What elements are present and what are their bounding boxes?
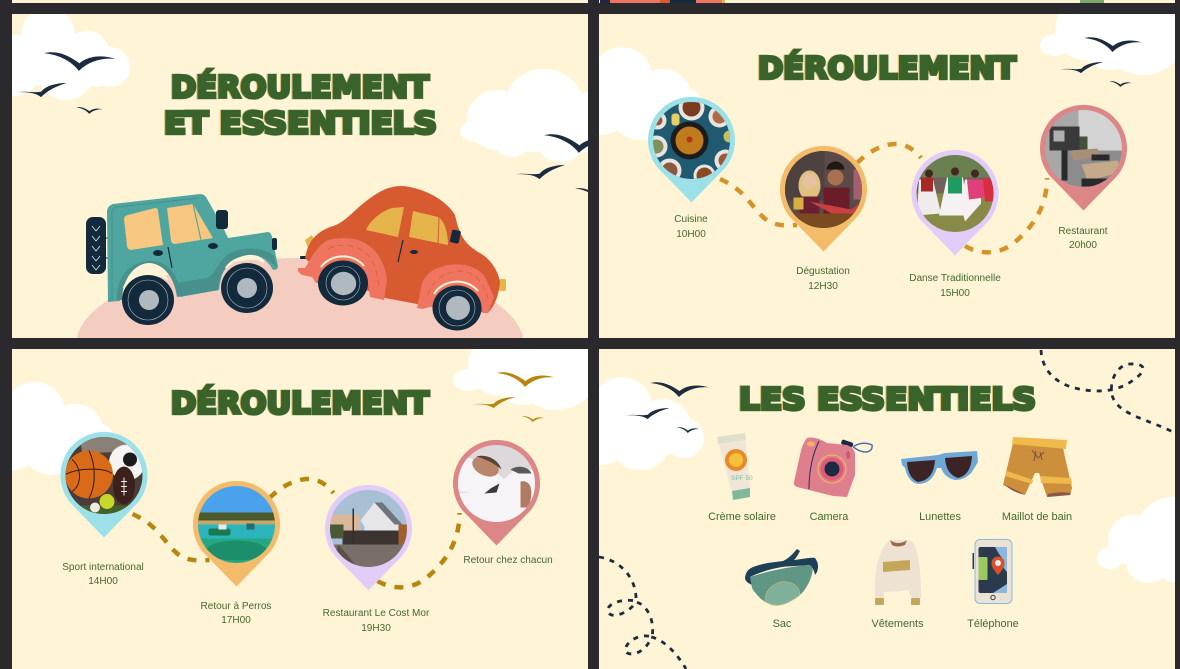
panel: les essentiels: [570, 349, 1180, 669]
dashed trail: top right: [1041, 350, 1175, 433]
panel: déroulement matin: [570, 0, 1180, 338]
panel: déroulement après-midi: [12, 349, 588, 669]
icon: crème solaire: SPF 50: [731, 475, 753, 482]
birds: right flock: [516, 134, 588, 192]
label: vêtements: Vêtements: [871, 618, 924, 630]
icon: sac: [745, 549, 818, 606]
birds: top left flock: [16, 52, 115, 114]
label: cuisine: Cuisine: [674, 214, 708, 225]
label: crème solaire: Crème solaire: [708, 511, 776, 523]
dashed route: [132, 479, 460, 587]
label: retour chez chacun: Retour chez chacun: [463, 555, 553, 566]
icon: crème solaire: [717, 433, 753, 500]
label: danse: Danse Traditionnelle: [909, 273, 1001, 284]
cloud: left: [599, 377, 704, 470]
panel: title slide: [12, 14, 588, 338]
label: restaurant: 20h00: [1069, 240, 1097, 251]
icon: maillot de bain: [1003, 437, 1072, 497]
pin: restaurant: [1040, 105, 1127, 210]
cloud: top right: [1040, 14, 1175, 75]
label: restaurant: Restaurant: [1058, 226, 1108, 237]
cloud: right: [460, 69, 588, 162]
heading: DÉROULEMENT: [758, 50, 1017, 86]
heading: [164, 70, 437, 142]
heading: DÉROULEMENT: [171, 386, 430, 422]
heading: DÉROULEMENT: [171, 70, 430, 106]
label: perros: Retour à Perros: [201, 601, 271, 612]
hill: [76, 258, 524, 338]
icon: camera: [794, 438, 872, 497]
icon: téléphone: [972, 540, 1012, 604]
dashed trail: bottom left: [599, 557, 686, 669]
pin: retour chez chacun: [453, 440, 540, 546]
cloud: left: [599, 47, 701, 140]
illustration: red beetle: [298, 186, 506, 330]
birds: [1060, 37, 1142, 87]
pin: le cost mor: [325, 485, 412, 590]
label: perros: 17H00: [221, 615, 251, 626]
label: cuisine: 10H00: [676, 229, 706, 240]
cloud: top left: [12, 14, 130, 100]
pin: dégustation: [780, 146, 867, 252]
previous slides sliver: [12, 0, 1175, 3]
dashed route: [720, 144, 1047, 252]
label: sac: Sac: [773, 618, 792, 630]
pin: cuisine: [646, 94, 736, 202]
label: dégustation: 12H30: [808, 281, 838, 292]
label: maillot de bain: Maillot de bain: [1002, 511, 1072, 523]
pin: sport: [60, 432, 148, 538]
heading: LES ESSENTIELS: [739, 382, 1036, 418]
birds: [626, 382, 709, 433]
cloud: top right: [453, 349, 588, 410]
label: camera: Camera: [810, 511, 849, 523]
pin: danse: [912, 150, 998, 256]
cloud: left: [12, 382, 114, 475]
pin: perros: [193, 481, 280, 586]
label: le cost mor: Restaurant Le Cost Mor: [323, 608, 430, 619]
label: téléphone: Téléphone: [967, 618, 1019, 630]
label: lunettes: Lunettes: [919, 511, 961, 523]
cloud: right: [1097, 497, 1180, 583]
label: le cost mor: 19H30: [361, 623, 391, 634]
icon: lunettes: [901, 451, 978, 484]
label: sport: Sport international: [62, 562, 144, 573]
illustration: green jeep: [86, 194, 278, 325]
label: sport: 14H00: [88, 576, 118, 587]
label: dégustation: Dégustation: [796, 266, 850, 277]
label: danse: 15H00: [940, 288, 970, 299]
birds: gold: [472, 372, 554, 422]
heading: ET ESSENTIELS: [164, 106, 437, 142]
icon: vêtements: [875, 540, 921, 605]
